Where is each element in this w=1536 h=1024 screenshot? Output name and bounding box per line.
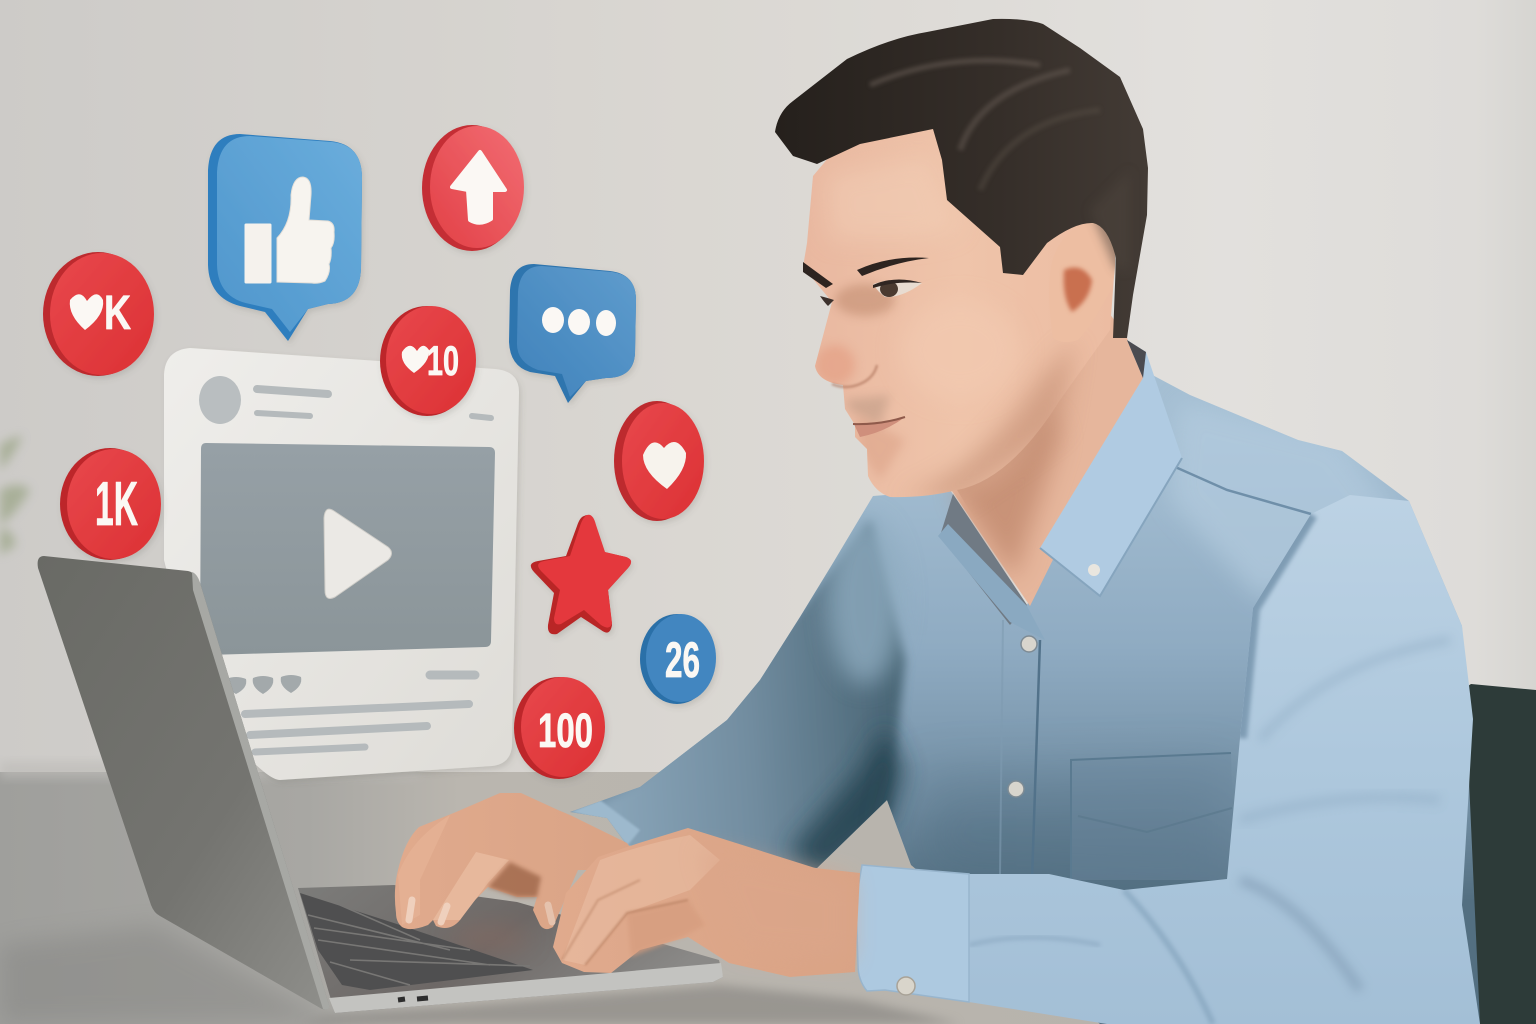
icon: heart K badge — [43, 252, 154, 376]
icon: star — [531, 515, 631, 634]
icon: 26 badge — [640, 614, 716, 704]
keyboard — [300, 893, 533, 990]
head and face — [775, 19, 1148, 500]
eyes — [820, 279, 922, 306]
icon: 100 badge: 100 — [538, 705, 593, 758]
post text lines — [245, 675, 475, 752]
hair — [775, 19, 1148, 338]
chair behind man — [1462, 684, 1536, 1024]
desk — [0, 762, 1536, 1024]
laptop — [38, 556, 723, 1013]
post header lines — [257, 389, 491, 418]
icon: heart K badge: K — [104, 287, 131, 340]
icon: 26 badge: 26 — [665, 632, 700, 688]
laptop base — [298, 885, 723, 1013]
plant at left edge — [0, 436, 30, 555]
shirt buttons — [1008, 636, 1037, 797]
video thumbnail — [200, 443, 495, 655]
social post card — [164, 348, 519, 780]
icon: speech bubble with dots — [509, 264, 636, 403]
icon: 1K badge — [60, 448, 161, 560]
post avatar — [199, 376, 241, 424]
icon: heart badge — [614, 401, 704, 521]
open collar — [938, 340, 1182, 640]
far hand — [395, 793, 640, 929]
shirt cuff — [856, 865, 969, 1002]
eyebrows — [803, 258, 929, 288]
shoulder seam — [1173, 466, 1311, 514]
man — [540, 19, 1500, 1024]
laptop front edge — [329, 963, 723, 1013]
near sleeve — [969, 495, 1480, 1024]
near hand — [553, 828, 860, 977]
laptop lid — [38, 556, 329, 1010]
nose — [832, 365, 877, 387]
ear — [1049, 221, 1115, 342]
shirt pocket — [1072, 841, 1228, 880]
icon: thumbs up bubble — [208, 134, 362, 341]
mouth — [854, 417, 905, 437]
shirt placket — [1032, 640, 1040, 880]
icon: heart 10 badge: 10 — [427, 337, 459, 384]
neck — [950, 300, 1143, 606]
reaction hearts — [226, 675, 301, 694]
icon: up arrow badge — [422, 125, 524, 251]
icon: 100 badge — [514, 677, 605, 779]
shirt torso and far arm — [570, 376, 1480, 1024]
icon: 1K badge: 1K — [95, 470, 138, 539]
icon: heart 10 badge — [380, 306, 476, 416]
play button — [324, 509, 392, 598]
cuff button — [897, 977, 915, 995]
